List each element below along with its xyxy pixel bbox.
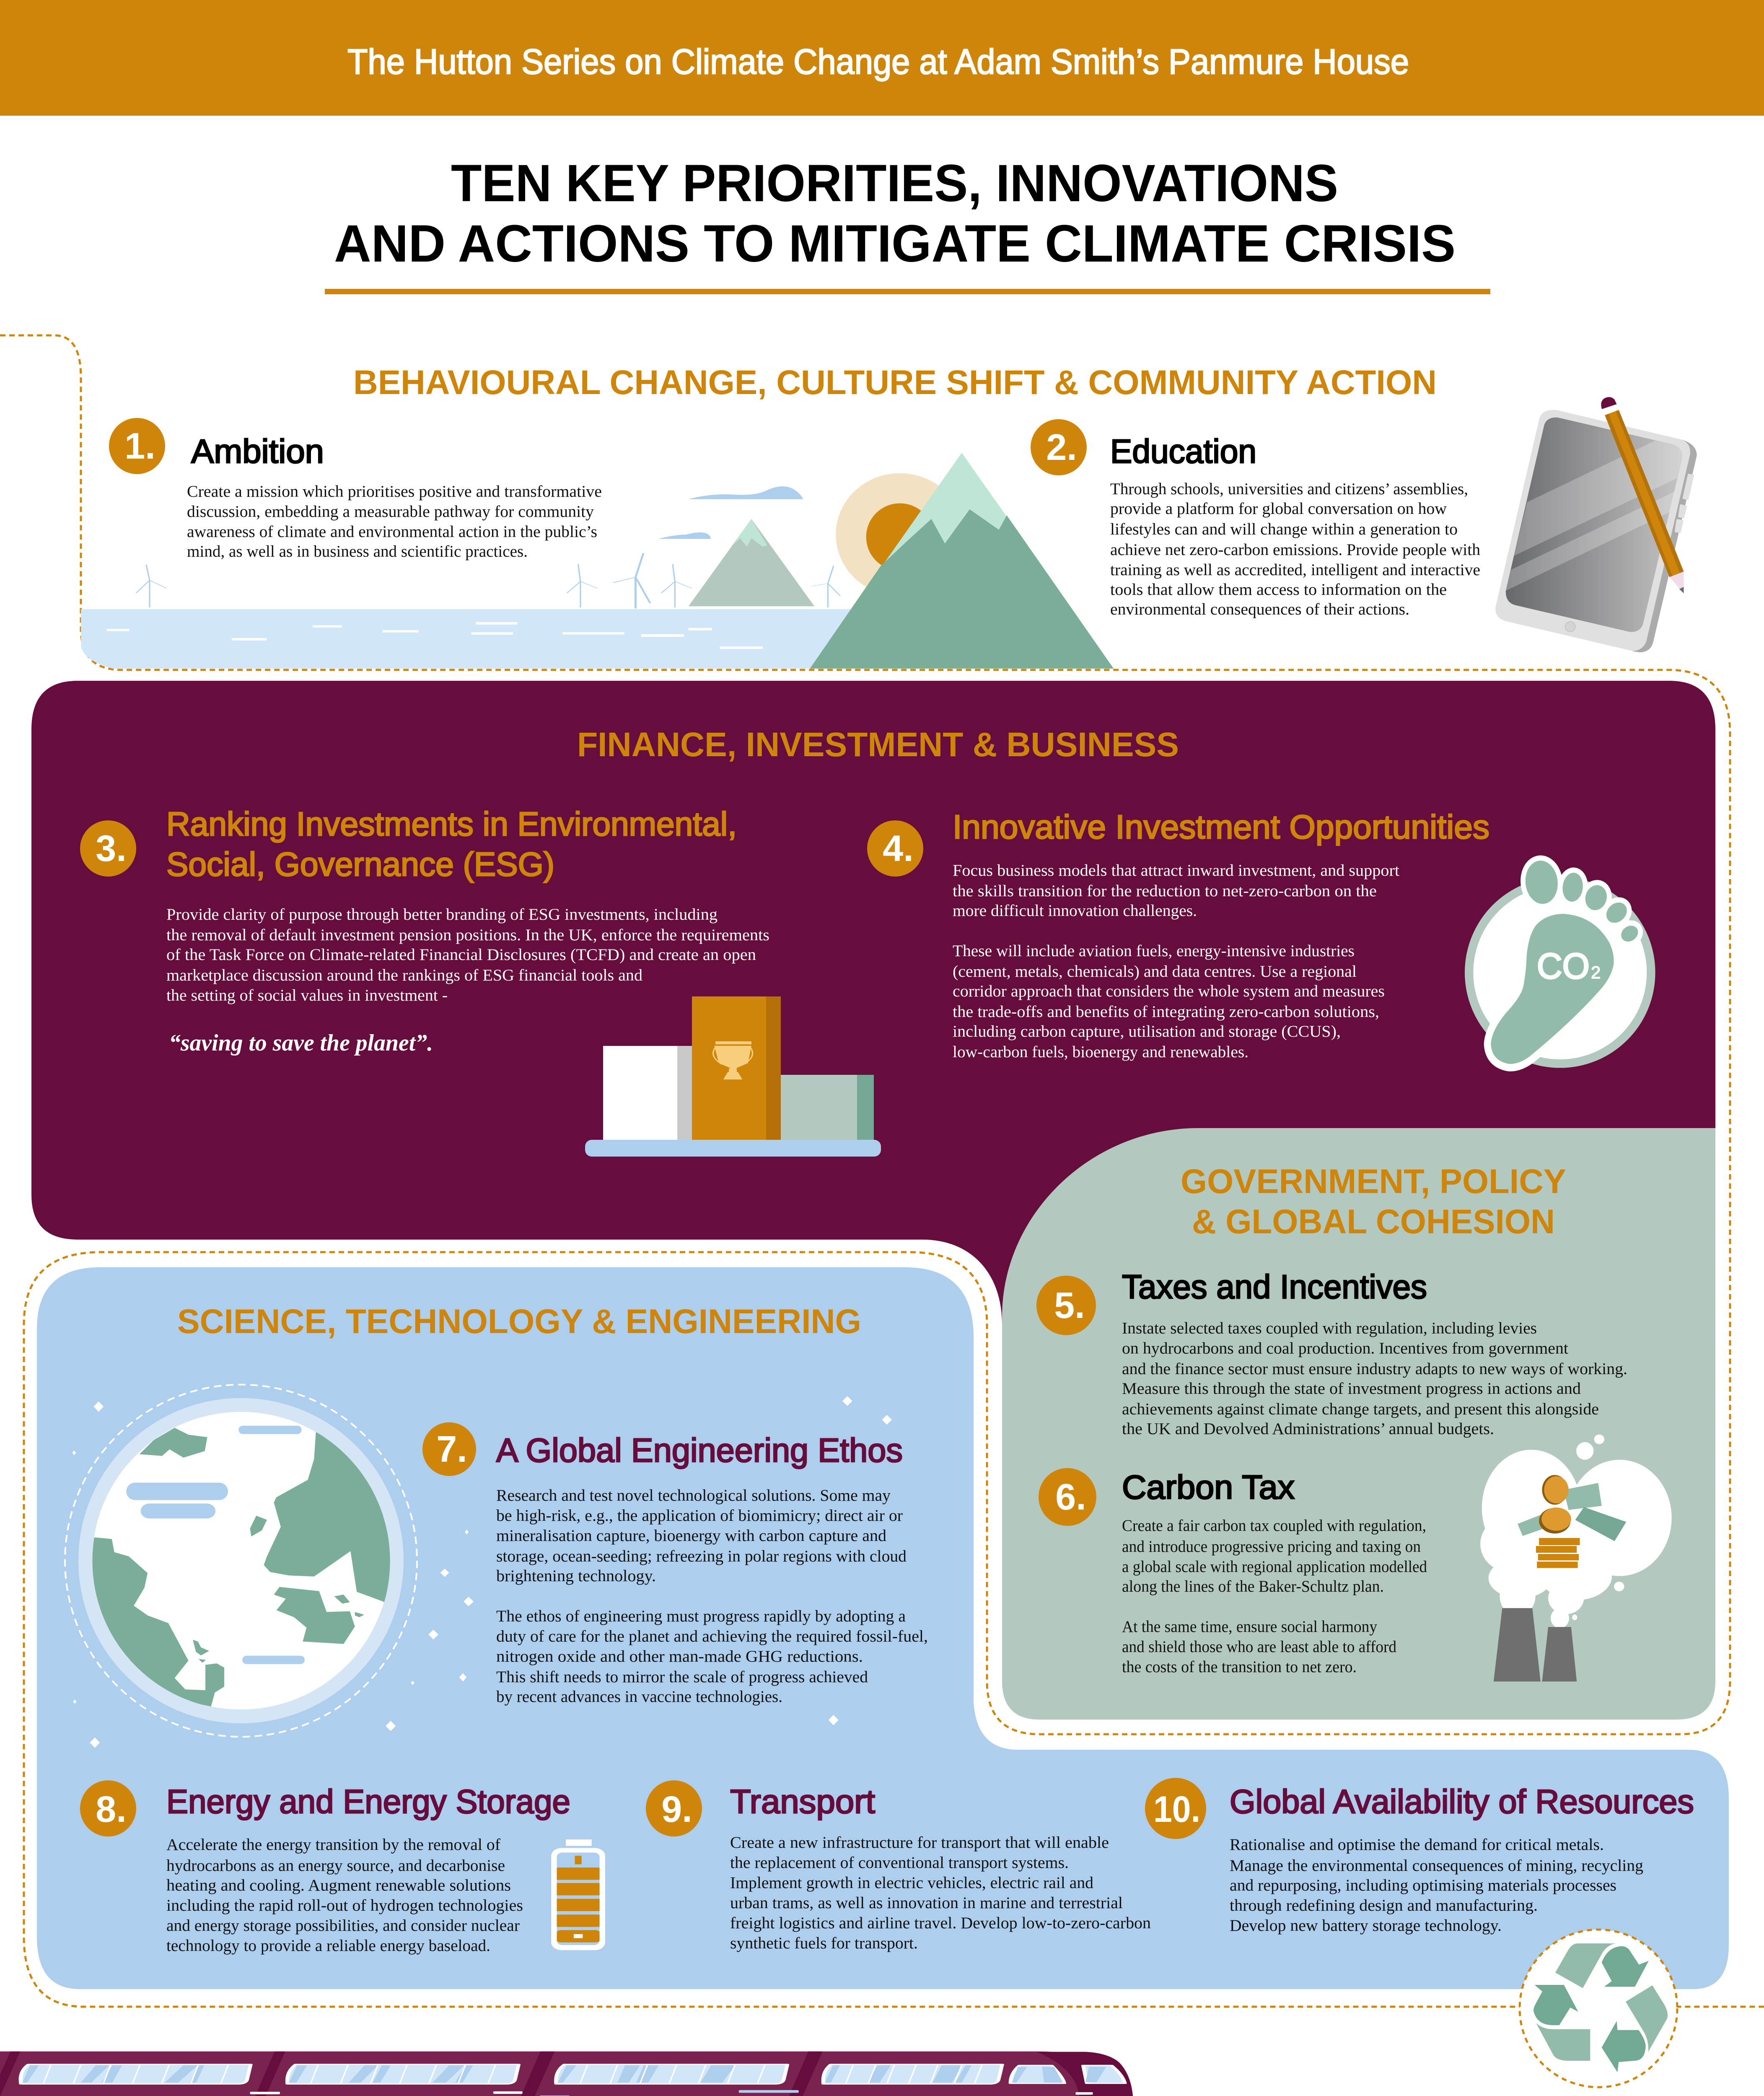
energy title: Energy and Energy Storage bbox=[166, 1783, 570, 1820]
icon: CO2 footprint: CO bbox=[1537, 946, 1590, 986]
item 8: energy storage bbox=[80, 1780, 570, 1955]
energy body: Accelerate the energy transition by the removal of bbox=[166, 1836, 500, 1854]
transport body: Implement growth in electric vehicles, electric rail and bbox=[730, 1874, 1094, 1892]
item 1: ambition bbox=[109, 418, 602, 560]
transport body: synthetic fuels for transport. bbox=[730, 1934, 918, 1952]
investment body: including carbon capture, utilisation and storage (CCUS), bbox=[953, 1022, 1341, 1040]
heading: finance: FINANCE, INVESTMENT & BUSINESS bbox=[577, 726, 1179, 764]
energy body: technology to provide a reliable energy baseload. bbox=[166, 1937, 490, 1955]
icon: books with trophy bbox=[585, 996, 881, 1157]
ethos body: duty of care for the planet and achieving the required fossil-fuel, bbox=[496, 1627, 928, 1645]
carbon tax title: Carbon Tax bbox=[1122, 1468, 1295, 1506]
ethos body: Research and test novel technological solutions. Some may bbox=[496, 1486, 891, 1505]
transport body: urban trams, as well as innovation in marine and terrestrial bbox=[730, 1894, 1123, 1912]
number badge 1 bbox=[109, 418, 165, 474]
number badge 1: 1. bbox=[124, 425, 155, 467]
number badge 4 bbox=[867, 820, 923, 877]
icon: tablet and pencil bbox=[1495, 397, 1697, 652]
education body: provide a platform for global conversation on how bbox=[1110, 500, 1447, 518]
number badge 3 bbox=[80, 820, 136, 877]
energy body: heating and cooling. Augment renewable solutions bbox=[166, 1876, 511, 1894]
ESG body: marketplace discussion around the rankings of ESG financial tools and bbox=[166, 966, 643, 984]
carbon tax body: and introduce progressive pricing and taxing on bbox=[1122, 1538, 1421, 1556]
icon: smokestacks with coins and notes bbox=[1480, 1435, 1672, 1681]
ESG title: Ranking Investments in Environmental, bbox=[166, 805, 737, 843]
ethos body: mineralisation capture, bioenergy with carbon capture and bbox=[496, 1527, 887, 1545]
banknotes bbox=[1518, 1483, 1626, 1541]
number badge 8 bbox=[80, 1780, 136, 1837]
ethos body bbox=[496, 1486, 928, 1706]
number badge 3: 3. bbox=[96, 828, 127, 869]
taxes body bbox=[1122, 1319, 1627, 1438]
number badge 10: 10. bbox=[1153, 1788, 1200, 1830]
sparkles bbox=[72, 1396, 892, 1748]
icon: sun bbox=[836, 473, 964, 596]
windows bbox=[21, 2064, 1125, 2084]
heading: government bbox=[1181, 1162, 1566, 1241]
item 9: transport bbox=[646, 1780, 1151, 1952]
ethos body: storage, ocean-seeding; refreezing in polar regions with cloud bbox=[496, 1547, 907, 1565]
number badge 4: 4. bbox=[883, 828, 914, 869]
icon: globe bbox=[65, 1385, 417, 1737]
resources title: Global Availability of Resources bbox=[1230, 1783, 1694, 1820]
ESG body bbox=[166, 905, 769, 1004]
education body bbox=[1110, 480, 1480, 618]
resources body: Manage the environmental consequences of mining, recycling bbox=[1230, 1857, 1643, 1875]
education title: Education bbox=[1110, 433, 1256, 470]
transport body bbox=[730, 1834, 1151, 1952]
header banner bbox=[0, 0, 1764, 116]
taxes body: Instate selected taxes coupled with regulation, including levies bbox=[1122, 1319, 1537, 1337]
carbon tax body: the costs of the transition to net zero. bbox=[1122, 1658, 1357, 1676]
icon: wind turbines bbox=[136, 553, 840, 608]
carbon tax body: Create a fair carbon tax coupled with regulation, bbox=[1122, 1517, 1426, 1535]
item 5: taxes and incentives bbox=[1036, 1268, 1627, 1438]
investment body: corridor approach that considers the whole system and measures bbox=[953, 982, 1385, 1000]
panel: government, policy and global cohesion bbox=[1002, 1128, 1715, 1720]
illustration: train bbox=[0, 2052, 1147, 2096]
resources body: Develop new battery storage technology. bbox=[1230, 1917, 1502, 1935]
transport body: freight logistics and airline travel. Develop low-to-zero-carbon bbox=[730, 1914, 1151, 1932]
door seams bbox=[0, 2052, 823, 2096]
investment body: the trade-offs and benefits of integrating zero-carbon solutions, bbox=[953, 1003, 1379, 1021]
item 6: carbon tax bbox=[1039, 1468, 1427, 1676]
item 4: investment opportunities bbox=[867, 808, 1489, 1061]
education body: environmental consequences of their actions. bbox=[1110, 600, 1409, 618]
ambition body: discussion, embedding a measurable pathway for community bbox=[187, 503, 594, 521]
ambition body: awareness of climate and environmental action in the public’s bbox=[187, 523, 597, 541]
energy body bbox=[166, 1836, 523, 1955]
ethos body: This shift needs to mirror the scale of progress achieved bbox=[496, 1668, 868, 1686]
carbon tax body bbox=[1122, 1517, 1427, 1676]
carbon tax body: and shield those who are least able to afford bbox=[1122, 1638, 1396, 1656]
coin stack bbox=[1536, 1538, 1580, 1568]
ethos body: brightening technology. bbox=[496, 1567, 656, 1585]
ambition body bbox=[187, 482, 602, 560]
number badge 5 bbox=[1036, 1276, 1096, 1335]
education body: Through schools, universities and citizens’ assemblies, bbox=[1110, 480, 1468, 498]
investment body: low-carbon fuels, bioenergy and renewables. bbox=[953, 1043, 1249, 1061]
number badge 8: 8. bbox=[96, 1788, 127, 1830]
taxes body: achievements against climate change targets, and present this alongside bbox=[1122, 1400, 1599, 1418]
investment body: the skills transition for the reduction to net-zero-carbon on the bbox=[953, 882, 1377, 900]
investment body: more difficult innovation challenges. bbox=[953, 902, 1197, 920]
heading: government: & GLOBAL COHESION bbox=[1192, 1203, 1555, 1241]
transport title: Transport bbox=[730, 1783, 875, 1820]
number badge 7: 7. bbox=[436, 1428, 467, 1470]
ESG title: Social, Governance (ESG) bbox=[166, 846, 554, 883]
number badge 10 bbox=[1145, 1778, 1206, 1839]
ESG body: Provide clarity of purpose through better branding of ESG investments, including bbox=[166, 905, 718, 923]
number badge 7 bbox=[422, 1422, 476, 1476]
number badge 5: 5. bbox=[1054, 1284, 1085, 1326]
icon: small mountain bbox=[689, 519, 814, 606]
icon: large mountain bbox=[810, 453, 1114, 669]
item 10: global availability of resources bbox=[1145, 1778, 1694, 1935]
energy body: and energy storage possibilities, and consider nuclear bbox=[166, 1917, 520, 1935]
number badge 6 bbox=[1039, 1468, 1096, 1526]
taxes body: Measure this through the state of investment progress in actions and bbox=[1122, 1380, 1581, 1398]
ESG body: the removal of default investment pension positions. In the UK, enforce the requirements bbox=[166, 926, 769, 944]
energy body: including the rapid roll-out of hydrogen technologies bbox=[166, 1896, 523, 1914]
number badge 2: 2. bbox=[1046, 426, 1077, 468]
window reflections bbox=[23, 2065, 1106, 2083]
investment body: These will include aviation fuels, energy-intensive industries bbox=[953, 942, 1355, 960]
icon: CO2 footprint: 2 bbox=[1591, 962, 1601, 982]
quote: “saving to save the planet”. bbox=[169, 1030, 433, 1056]
icon: wave marks bbox=[107, 622, 763, 649]
carbon tax body: At the same time, ensure social harmony bbox=[1122, 1618, 1377, 1636]
taxes body: the UK and Devolved Administrations’ annual budgets. bbox=[1122, 1420, 1494, 1438]
header banner: The Hutton Series on Climate Change at Adam Smith’s Panmure House bbox=[347, 42, 1409, 81]
resources body: and repurposing, including optimising materials processes bbox=[1230, 1876, 1616, 1894]
ethos body: The ethos of engineering must progress rapidly by adopting a bbox=[496, 1607, 906, 1625]
education body: training as well as accredited, intelligent and interactive bbox=[1110, 561, 1480, 579]
education body: achieve net zero-carbon emissions. Provide people with bbox=[1110, 541, 1480, 559]
title: AND ACTIONS TO MITIGATE CLIMATE CRISIS bbox=[334, 215, 1456, 273]
number badge 9: 9. bbox=[661, 1788, 692, 1830]
panel: finance, investment and business bbox=[31, 681, 1715, 1325]
ethos body: be high-risk, e.g., the application of biomimicry; direct air or bbox=[496, 1507, 903, 1525]
taxes body: and the finance sector must ensure industry adapts to new ways of working. bbox=[1122, 1360, 1627, 1378]
ethos title: A Global Engineering Ethos bbox=[496, 1432, 903, 1469]
icon: sea bbox=[81, 609, 855, 669]
item 7: global engineering ethos bbox=[422, 1422, 928, 1706]
ambition body: mind, as well as in business and scientific practices. bbox=[187, 542, 528, 560]
taxes body: on hydrocarbons and coal production. Incentives from government bbox=[1122, 1339, 1568, 1357]
resources body: through redefining design and manufacturing. bbox=[1230, 1896, 1538, 1914]
ethos body: nitrogen oxide and other man-made GHG reductions. bbox=[496, 1647, 863, 1665]
window mullions bbox=[44, 2065, 982, 2084]
title bbox=[325, 154, 1490, 294]
investment body: Focus business models that attract inward investment, and support bbox=[953, 861, 1399, 879]
transport body: Create a new infrastructure for transport that will enable bbox=[730, 1834, 1109, 1852]
heading: government: GOVERNMENT, POLICY bbox=[1181, 1162, 1566, 1201]
education body: lifestyles can and will change within a generation to bbox=[1110, 520, 1458, 538]
item 2: education bbox=[1031, 419, 1480, 618]
number badge 9 bbox=[646, 1780, 702, 1837]
resources body bbox=[1230, 1836, 1643, 1935]
panel: science, technology and engineering bbox=[37, 1267, 1729, 1989]
number badge 6: 6. bbox=[1055, 1476, 1086, 1518]
education body: tools that allow them access to information on the bbox=[1110, 581, 1447, 599]
ESG body: of the Task Force on Climate-related Financial Disclosures (TCFD) and create an open bbox=[166, 946, 756, 964]
small lights bbox=[250, 2091, 1093, 2096]
carbon tax body: a global scale with regional application modelled bbox=[1122, 1558, 1427, 1576]
energy body: hydrocarbons as an energy source, and decarbonise bbox=[166, 1857, 505, 1875]
number badge 2 bbox=[1031, 419, 1087, 475]
train body bbox=[0, 2052, 1133, 2096]
chimneys bbox=[1494, 1608, 1577, 1681]
investment title: Innovative Investment Opportunities bbox=[953, 808, 1489, 846]
ambition title: Ambition bbox=[191, 433, 324, 470]
transport body: the replacement of conventional transport systems. bbox=[730, 1854, 1069, 1872]
item 3: ESG bbox=[80, 805, 769, 1056]
heading: behavioural change: BEHAVIOURAL CHANGE, CULTURE SHIFT & COMMUNITY ACTION bbox=[353, 363, 1437, 402]
icon: battery bbox=[551, 1839, 605, 1950]
icon: recycling symbol bbox=[1520, 1930, 1677, 2087]
carbon tax body: along the lines of the Baker-Schultz plan. bbox=[1122, 1577, 1384, 1595]
investment body bbox=[953, 861, 1399, 1061]
resources body: Rationalise and optimise the demand for critical metals. bbox=[1230, 1836, 1604, 1854]
ethos body: by recent advances in vaccine technologies. bbox=[496, 1688, 782, 1706]
investment body: (cement, metals, chemicals) and data centres. Use a regional bbox=[953, 962, 1357, 981]
dashed connector path bbox=[0, 335, 1764, 2007]
smoke cloud bbox=[1480, 1435, 1672, 1628]
heading: science: SCIENCE, TECHNOLOGY & ENGINEERING bbox=[177, 1302, 861, 1341]
ambition body: Create a mission which prioritises positive and transformative bbox=[187, 482, 602, 501]
taxes title: Taxes and Incentives bbox=[1122, 1268, 1427, 1305]
icon: trophy bbox=[713, 1041, 753, 1079]
falling coins bbox=[1539, 1475, 1571, 1533]
ESG body: the setting of social values in investment - bbox=[166, 986, 448, 1004]
blue marker lights bbox=[540, 2090, 799, 2096]
title: TEN KEY PRIORITIES, INNOVATIONS bbox=[451, 154, 1338, 213]
icon: CO2 footprint bbox=[1465, 859, 1655, 1068]
icon: clouds bbox=[658, 486, 803, 539]
ESG title bbox=[166, 805, 737, 883]
panel: behavioural change illustration scene bbox=[81, 453, 1114, 669]
